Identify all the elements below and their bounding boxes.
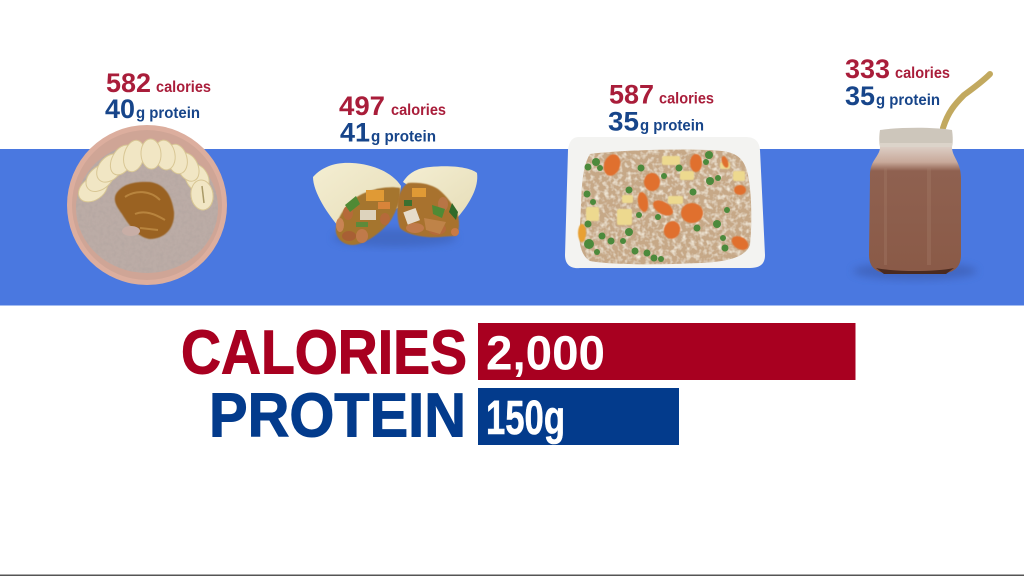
icon: burrito halves bbox=[313, 163, 477, 247]
meal 3 stats: 35 bbox=[608, 106, 639, 136]
protein label: PROTEIN bbox=[209, 382, 466, 450]
left tortilla bbox=[313, 163, 401, 228]
meal 4 stats: g protein bbox=[876, 92, 940, 109]
meal 1 stats bbox=[105, 68, 211, 124]
meal 4 stats: 35 bbox=[845, 81, 875, 111]
meal 4 stats: calories bbox=[895, 65, 950, 82]
protein bar bbox=[478, 388, 679, 445]
highlights bbox=[884, 168, 931, 265]
peanut butter bbox=[115, 182, 174, 239]
carrots bbox=[578, 152, 751, 253]
meal 1 stats: calories bbox=[156, 79, 211, 96]
meal 2 stats: 497 bbox=[339, 91, 385, 121]
icon: oatmeal bowl with banana and peanut butter bbox=[67, 125, 227, 285]
banana slices bbox=[74, 138, 215, 211]
protein bar: 150g bbox=[486, 392, 565, 445]
meal 1 stats: 582 bbox=[106, 68, 151, 98]
meal 3 stats: calories bbox=[659, 90, 714, 108]
egg pieces bbox=[586, 156, 745, 225]
left filling bbox=[336, 187, 400, 245]
meal 3 stats: 587 bbox=[609, 80, 654, 110]
meal 2 stats bbox=[339, 91, 446, 148]
calories label: CALORIES bbox=[181, 318, 467, 388]
peas bbox=[584, 151, 730, 262]
jar lid bbox=[879, 128, 953, 147]
meal 1 stats: g protein bbox=[136, 105, 200, 122]
meal 2 stats: g protein bbox=[371, 128, 436, 146]
meal 4 stats bbox=[845, 54, 950, 111]
right filling bbox=[397, 183, 459, 237]
calories bar: 2,000 bbox=[486, 328, 605, 380]
blue band bbox=[0, 149, 1024, 306]
meal 2 stats: calories bbox=[391, 102, 446, 119]
right tortilla bbox=[403, 166, 477, 217]
meal 2 stats: 41 bbox=[340, 118, 370, 148]
meal 3 stats bbox=[608, 80, 714, 136]
jar body bbox=[869, 147, 961, 273]
icon: chocolate protein shake in a mason jar bbox=[853, 74, 990, 280]
meal 3 stats: g protein bbox=[640, 118, 704, 134]
meal 1 stats: 40 bbox=[105, 94, 135, 124]
meal 4 stats: 333 bbox=[845, 54, 890, 84]
icon: meal prep container of fried rice bbox=[565, 137, 765, 268]
calories bar bbox=[478, 323, 856, 380]
straw bbox=[943, 74, 990, 128]
